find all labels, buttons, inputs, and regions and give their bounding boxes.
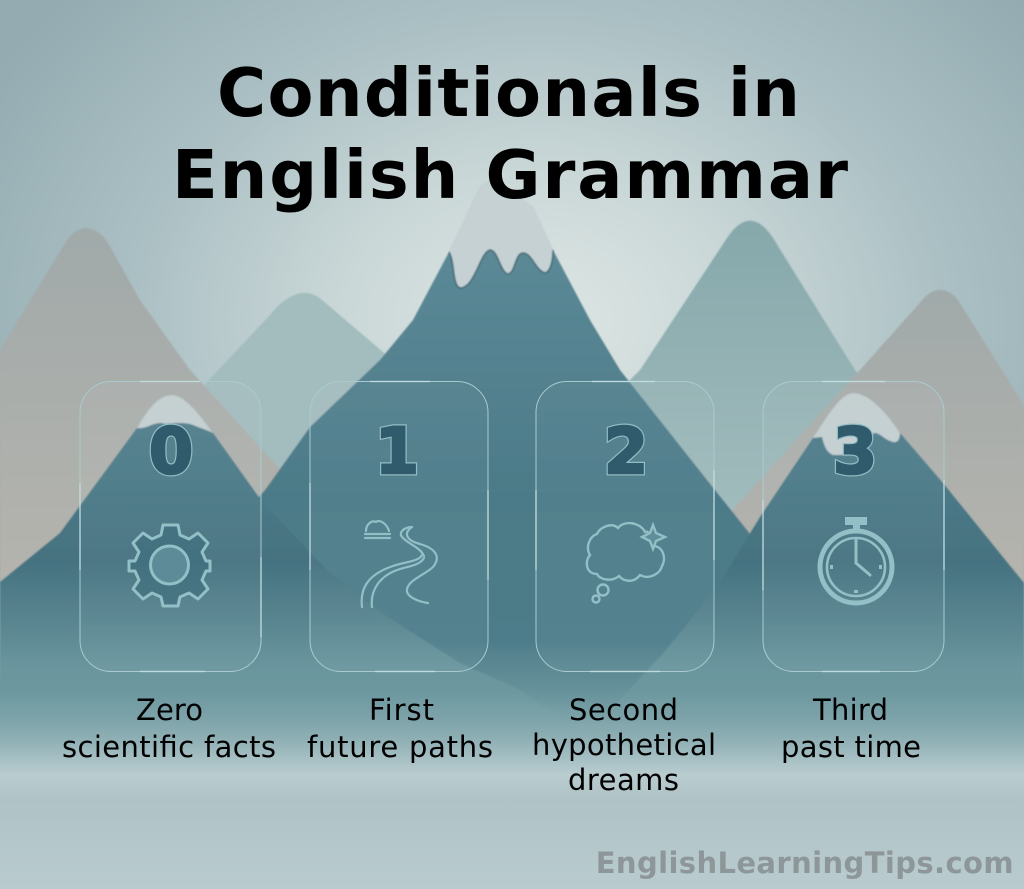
number 3: 3 [833, 415, 877, 488]
mountain: central peak [230, 181, 755, 760]
mountain: front left [0, 395, 620, 760]
number 0: 0 [149, 415, 193, 488]
label: Zero [62, 693, 276, 764]
mountain: central snow cap [449, 181, 553, 288]
number 2: 2 [604, 415, 648, 488]
label: Second: Second [569, 693, 678, 727]
label: First: future paths [307, 730, 493, 764]
mountain: front right [560, 393, 1024, 760]
label: Zero: Zero [136, 693, 203, 727]
background mountains [0, 181, 1024, 760]
icon: thought cloud with star [587, 523, 665, 602]
ground mist [0, 800, 1024, 889]
mountain: central snow shadow line [449, 250, 553, 288]
watermark: EnglishLearningTips.com [596, 846, 1014, 880]
card panel [763, 382, 944, 672]
mountain: far pale left [180, 293, 420, 560]
number 2: 2 [604, 415, 648, 488]
label: Third: Third [812, 693, 888, 727]
card panel [310, 382, 488, 672]
mountain: far teal right [610, 221, 905, 600]
number 1: 1 [375, 415, 419, 488]
label: Third: past time [781, 730, 921, 764]
foreground mountains [0, 393, 1024, 760]
label: First: First [369, 693, 434, 727]
mountain: front right snow [813, 393, 900, 455]
number 1: 1 [375, 415, 419, 488]
number 0: 0 [149, 415, 193, 488]
label: Second: hypothetical [532, 728, 716, 762]
mountain: front left snow [137, 395, 213, 433]
icon: gear [129, 525, 210, 606]
card: Second [536, 382, 714, 672]
icon: stopwatch [820, 517, 892, 603]
label: Zero: scientific facts [62, 730, 276, 764]
icon: winding road and cloud [362, 521, 437, 607]
fog band [0, 640, 1024, 800]
number 3: 3 [833, 415, 877, 488]
card panel [536, 382, 714, 672]
title [172, 54, 848, 214]
card: Zero [80, 382, 261, 672]
card panel [80, 382, 261, 672]
mountain: grey left [0, 228, 330, 640]
title: English Grammar [172, 136, 848, 214]
card: First [310, 382, 488, 672]
label: Third [781, 693, 921, 764]
card: Third [763, 382, 944, 672]
title: Conditionals in [217, 54, 800, 132]
label: Second [532, 693, 716, 797]
label: First [307, 693, 493, 764]
label: Second: dreams [568, 763, 679, 797]
mountain: grey right [730, 290, 1024, 620]
